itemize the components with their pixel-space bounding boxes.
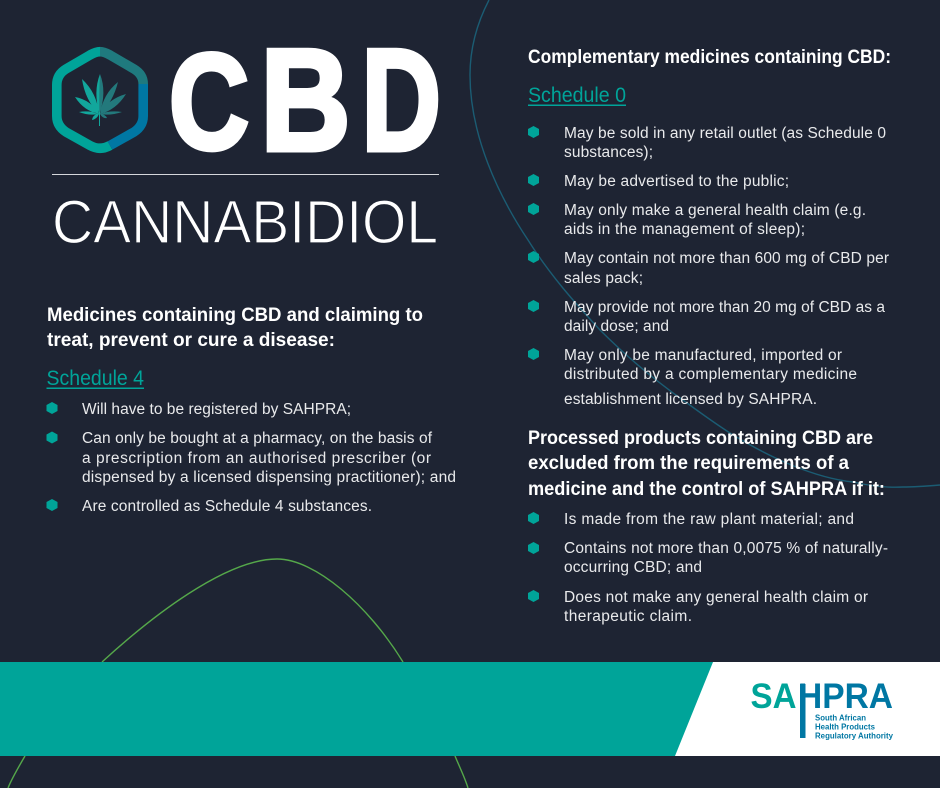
heading: medicines claiming to treat: treat, prevent or cure a disease:: [47, 330, 335, 351]
title: CBD: C: [169, 26, 249, 178]
hexagon ring: [57, 52, 143, 148]
H stem: [800, 684, 806, 738]
heading: complementary medicines: Complementary medicines containing CBD:: [528, 47, 891, 68]
heading: processed products: [528, 428, 885, 500]
white logo panel: [675, 662, 940, 756]
bullet text: [564, 511, 888, 625]
panel: processed products: [528, 428, 888, 625]
bullet text: daily dose; and: [564, 318, 669, 335]
bullet text: Does not make any general health claim or: [564, 589, 868, 606]
bullet text: occurring CBD; and: [564, 559, 702, 576]
SAHPRA logo: [750, 677, 893, 740]
wordmark: [750, 677, 893, 716]
bullet text: Is made from the raw plant material; and: [564, 511, 854, 528]
bullet text: sales pack;: [564, 270, 643, 287]
bullet text: May provide not more than 20 mg of CBD as a: [564, 299, 885, 316]
heading: medicines claiming to treat: [47, 305, 423, 351]
wordmark: HPRA: [798, 677, 893, 716]
full name: South African: [815, 712, 866, 722]
bullet text: a prescription from an authorised prescriber (or: [82, 450, 431, 467]
subtitle: CANNABIDIOL: CANNABIDIOL: [52, 188, 438, 256]
bullet text: dispensed by a licensed dispensing practitioner); and: [82, 469, 456, 486]
title: CBD: D: [362, 19, 441, 181]
full name: Health Products: [815, 722, 875, 732]
subheading: Schedule 0: Schedule 0: [528, 84, 626, 107]
bullet text: establishment licensed by SAHPRA.: [564, 391, 817, 408]
bullet text: substances);: [564, 144, 653, 161]
heading: processed products: Processed products containing CBD are: [528, 428, 873, 449]
bullet text: Will have to be registered by SAHPRA;: [82, 401, 351, 418]
bullet text: [82, 401, 456, 515]
decorative green curves: [8, 559, 468, 788]
title: CBD: B: [260, 19, 350, 181]
wordmark: SA: [750, 677, 796, 716]
bullet text: [564, 125, 889, 408]
bullet icons: [528, 512, 539, 602]
bullet text: distributed by a complementary medicine: [564, 366, 857, 383]
full name: Regulatory Authority: [815, 730, 893, 740]
full name: [815, 712, 893, 740]
bullet text: aids in the management of sleep);: [564, 221, 805, 238]
decorative blue curve: [470, 0, 940, 487]
cannabis leaf: [75, 74, 126, 126]
teal footer band: [0, 662, 940, 756]
bullet text: Contains not more than 0,0075 % of naturally-: [564, 540, 888, 557]
bullet text: Are controlled as Schedule 4 substances.: [82, 498, 372, 515]
bullet icons: [46, 402, 58, 511]
bullet text: May be sold in any retail outlet (as Schedule 0: [564, 125, 886, 142]
bullet icons: [528, 126, 539, 360]
bullet text: Can only be bought at a pharmacy, on the basis of: [82, 430, 433, 447]
bullet text: May be advertised to the public;: [564, 173, 789, 190]
bullet text: May only make a general health claim (e.g.: [564, 202, 866, 219]
bullet text: May only be manufactured, imported or: [564, 347, 842, 364]
heading: processed products: medicine and the control of SAHPRA if it:: [528, 479, 885, 500]
panel: Schedule 0 complementary medicines: [528, 47, 891, 408]
title: CBD: [169, 19, 441, 181]
logo: hexagon with cannabis leaf: [57, 52, 143, 148]
heading: processed products: excluded from the requirements of a: [528, 453, 849, 474]
bullet text: May contain not more than 600 mg of CBD per: [564, 250, 889, 267]
panel: Schedule 4 medicines: [46, 305, 456, 515]
bullet text: therapeutic claim.: [564, 608, 692, 625]
subheading: Schedule 4: Schedule 4: [46, 367, 144, 390]
heading: medicines claiming to treat: Medicines containing CBD and claiming to: [47, 305, 423, 326]
divider under CBD: [52, 174, 439, 175]
